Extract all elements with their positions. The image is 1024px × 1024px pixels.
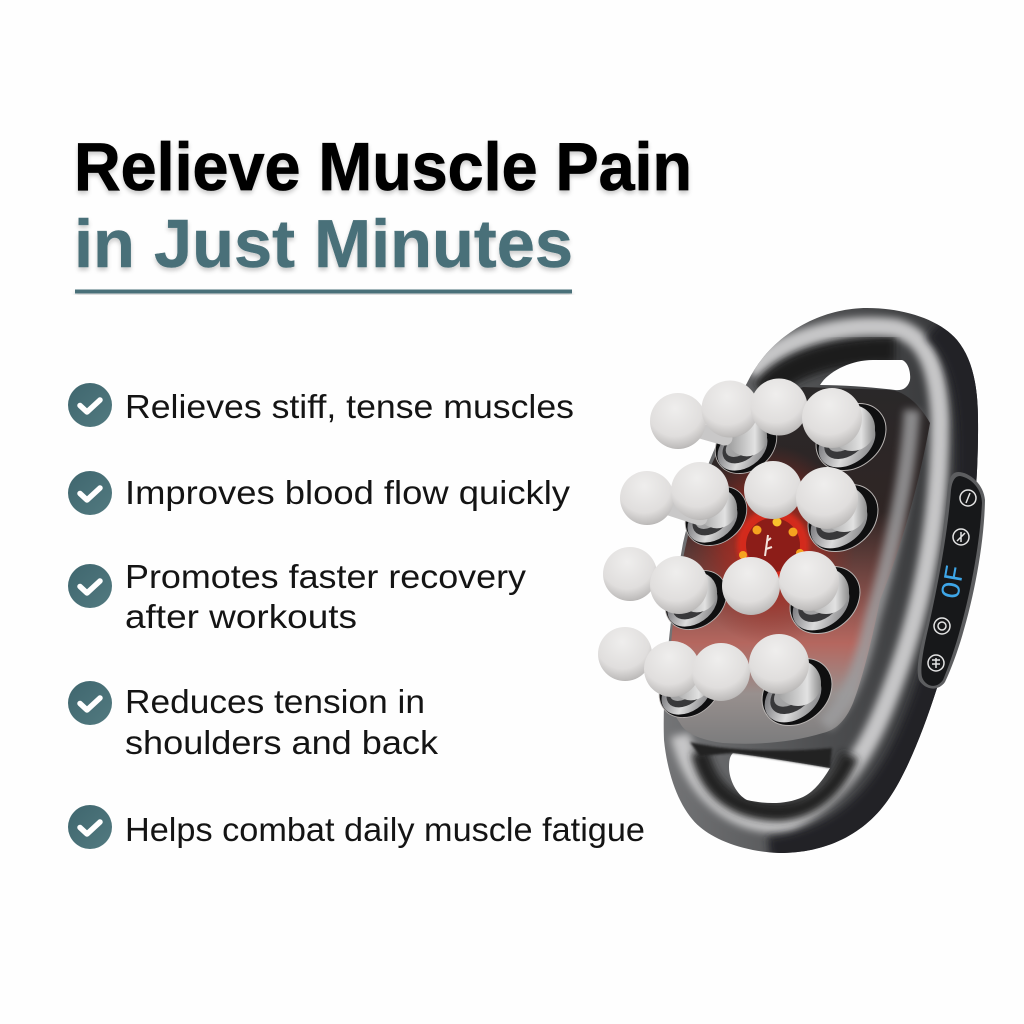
plate edge bevel <box>825 410 912 725</box>
title <box>74 129 692 294</box>
benefit 1: Relieves stiff, tense muscles <box>125 388 574 425</box>
control panel <box>918 472 985 689</box>
benefit 4: shoulders and back <box>125 724 439 761</box>
display readout: OF <box>937 563 973 602</box>
benefit 2 <box>68 471 571 515</box>
massager device <box>598 300 990 860</box>
benefit 3: Promotes faster recovery <box>125 558 527 595</box>
outer dark edge <box>770 322 978 858</box>
benefit 3 <box>68 558 527 635</box>
benefit 5: Helps combat daily muscle fatigue <box>125 811 645 848</box>
title line 2: in Just Minutes <box>74 206 573 282</box>
bottom handle opening <box>729 753 830 803</box>
red heat glow <box>685 445 855 645</box>
infographic canvas <box>68 140 985 853</box>
upper inner dark handle <box>765 350 895 392</box>
massage head stems <box>640 428 725 680</box>
massage balls <box>598 378 862 701</box>
benefit 4: Reduces tension in <box>125 683 425 720</box>
top handle opening <box>820 360 910 390</box>
device body <box>650 300 990 860</box>
benefit 2: Improves blood flow quickly <box>125 474 571 511</box>
benefits list <box>68 383 645 849</box>
title line 1: Relieve Muscle Pain <box>74 129 692 205</box>
heat ring <box>737 509 809 581</box>
lower inner dark handle <box>700 752 850 812</box>
massage head sockets <box>647 390 899 739</box>
face plate <box>669 387 930 744</box>
silver rim highlight <box>680 327 940 823</box>
benefit 3: after workouts <box>125 598 357 635</box>
benefit 1 <box>68 383 574 427</box>
dark band above bottom opening <box>690 742 832 768</box>
title underline <box>75 290 572 294</box>
benefit 4 <box>68 681 439 761</box>
